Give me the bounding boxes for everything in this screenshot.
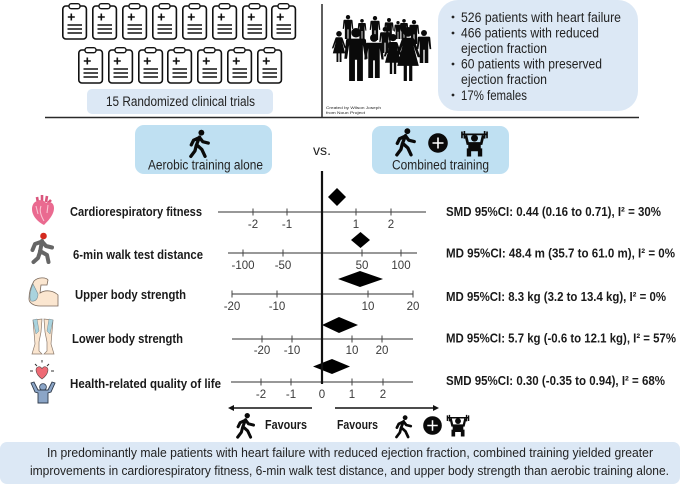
row: lower body strength axis: -20 (254, 345, 270, 357)
row: lower body strength axis: 20 (376, 345, 388, 357)
row: upper body strength axis: 10 (362, 301, 374, 313)
icon: crowd of patients (332, 15, 431, 81)
row: cardiorespiratory fitness axis: 2 (388, 219, 394, 231)
trials label (87, 89, 273, 114)
effect estimates: MD 95%CI: 8.3 kg (3.2 to 13.4 kg), I² = 0% (446, 290, 666, 304)
row: lower body strength axis: -10 (284, 345, 300, 357)
row: quality of life axis (231, 359, 413, 401)
outcome: health-related quality of life (30, 360, 221, 403)
row: 6-min walk axis: 50 (356, 260, 368, 272)
conclusion banner: In predominantly male patients with heart failure with reduced ejection fraction, combined training yielded greater (47, 445, 654, 460)
icon: happy person with heart (30, 360, 55, 403)
outcome: upper body strength: Upper body strength (75, 288, 186, 302)
row: lower body strength axis: 10 (346, 345, 358, 357)
panel: patient characteristics: ejection fraction (461, 72, 547, 87)
row: cardiorespiratory fitness axis (218, 188, 426, 231)
panel: randomized clinical trials (63, 4, 295, 114)
arrow: favours combined (335, 405, 439, 411)
conclusion banner (0, 442, 680, 484)
icon: grey walker with red head (32, 233, 52, 262)
effect estimates: SMD 95%CI: 0.44 (0.16 to 0.71), I² = 30% (446, 205, 661, 219)
row: quality of life axis: 1 (349, 389, 355, 401)
outcome: lower body strength (32, 319, 183, 354)
favours combined legend (337, 415, 469, 437)
forest plot (218, 171, 426, 401)
panel: aerobic training alone: Aerobic training alone (148, 158, 263, 172)
outcome: cardiorespiratory fitness (32, 195, 202, 225)
outcome: lower body strength: Lower body strength (72, 332, 183, 346)
panel: aerobic training alone (135, 125, 272, 174)
icon: heart (32, 195, 54, 225)
row: upper body strength axis: 20 (407, 301, 419, 313)
outcome: 6-min walk test distance (32, 233, 203, 262)
favours aerobic legend (238, 413, 307, 437)
row: upper body strength axis: -10 (269, 301, 285, 313)
vs label: vs. (313, 143, 331, 158)
favours combined legend: Favours (337, 418, 378, 432)
panel: patient characteristics (438, 0, 638, 111)
row: 6-min walk axis: -50 (275, 260, 291, 272)
row: lower body strength axis (232, 317, 413, 357)
row: 6-min walk axis: -100 (231, 260, 255, 272)
outcome: upper body strength (29, 278, 186, 306)
arrow: favours aerobic (228, 405, 312, 411)
row: quality of life axis: -2 (256, 389, 266, 401)
effect estimates: SMD 95%CI: 0.30 (-0.35 to 0.94), I² = 68% (446, 374, 665, 388)
row: cardiorespiratory fitness axis: 1 (353, 219, 359, 231)
row: 6-min walk axis: 100 (391, 260, 411, 272)
row: cardiorespiratory fitness axis: -1 (282, 219, 292, 231)
icon: flexed arm (29, 278, 58, 306)
row: 6-min walk axis (228, 232, 417, 272)
effect estimates (446, 205, 676, 388)
outcome: health-related quality of life: Health-related quality of life (70, 377, 221, 391)
panel: patient characteristics: ejection fraction (461, 41, 547, 56)
icon credit (326, 105, 381, 115)
outcome: 6-min walk test distance: 6-min walk test distance (73, 248, 203, 262)
row: cardiorespiratory fitness axis: -2 (248, 219, 258, 231)
panel: patient characteristics: 466 patients with reduced (461, 26, 599, 40)
icon: clipboards row two (79, 48, 281, 83)
row: upper body strength axis: -20 (224, 301, 240, 313)
row: quality of life axis: 0 (319, 389, 325, 401)
row: quality of life axis: 2 (380, 389, 386, 401)
panel: patient characteristics: 526 patients with heart failure (461, 10, 621, 25)
trials label: 15 Randomized clinical trials (106, 94, 255, 109)
icon: legs (32, 319, 54, 354)
row: quality of life axis: -1 (286, 389, 296, 401)
icon credit: Created by Wilson Joseph (326, 105, 381, 110)
icon: clipboards row one (63, 4, 295, 39)
panel: patient characteristics: 17% females (461, 88, 527, 103)
panel: combined training: Combined training (392, 158, 489, 172)
outcome: cardiorespiratory fitness: Cardiorespiratory fitness (70, 205, 202, 219)
favours aerobic legend: Favours (265, 418, 307, 432)
panel: patient characteristics: 60 patients with preserved (461, 56, 602, 72)
panel: combined training (372, 126, 509, 174)
row: upper body strength axis (224, 271, 419, 313)
icon credit: from Noun Project (326, 110, 366, 115)
